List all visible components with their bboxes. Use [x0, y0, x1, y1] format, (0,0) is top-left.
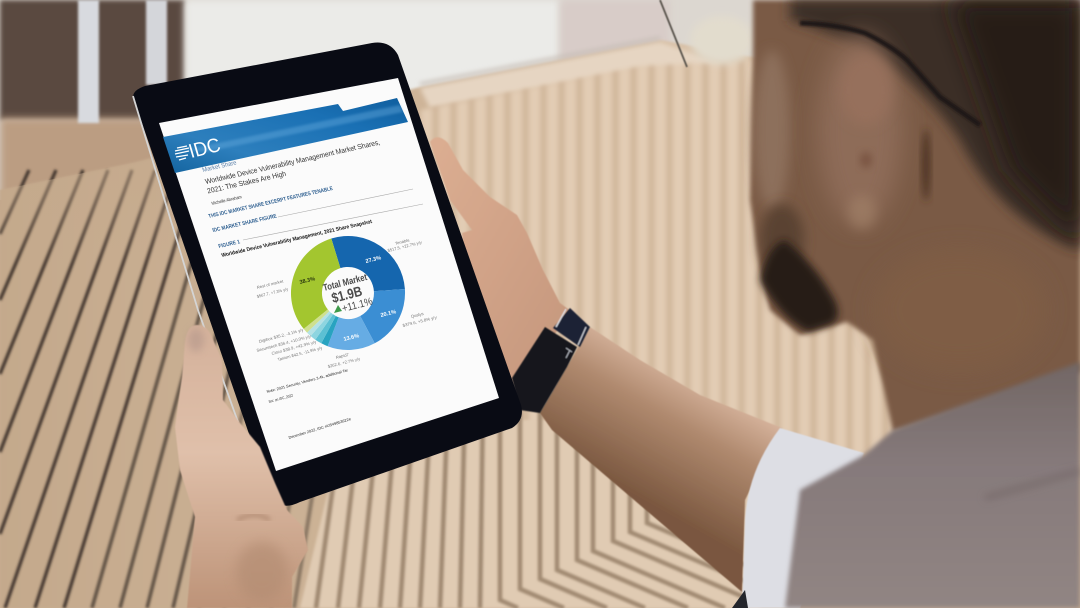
shirt cuff [742, 428, 864, 608]
ear [818, 35, 930, 229]
report headings [201, 138, 381, 259]
chart vendor labels [256, 237, 438, 369]
chart vendor labels: Rapid7 [335, 352, 350, 360]
dark strip below arm [732, 590, 748, 608]
shirt [785, 362, 1080, 608]
chart vendor labels: Securetech $36.4, +10.9% y/y [256, 333, 312, 353]
tablet body [133, 42, 522, 506]
chart vendor labels: $262.6, +2.7% y/y [327, 356, 361, 369]
chart vendor labels: Qualys [410, 311, 424, 319]
background wall [0, 0, 1080, 208]
floor chevron pattern [500, 400, 780, 608]
IDC logo: IDC [186, 134, 223, 163]
report divider rules [243, 189, 423, 240]
woven floor base and top band [0, 38, 900, 608]
tablet screen [159, 78, 499, 471]
wristwatch strap [512, 308, 590, 413]
eyeglasses arm [800, 23, 980, 125]
woven floor: dark stripes fanning on the left [0, 170, 365, 608]
hair [790, 0, 1080, 250]
chart vendor labels: Cisco $38.9, +42.9% y/y [271, 339, 318, 356]
chart vendor labels: Tenable [395, 237, 411, 246]
woven floor: lower vertical stripes [300, 400, 760, 608]
donut percentage labels: 20.1% [380, 309, 397, 319]
floor fade at top of stripes [0, 106, 400, 265]
donut centre total [322, 272, 374, 315]
report headings: THIS IDC MARKET SHARE EXCERPT FEATURES TENABLE [208, 186, 334, 220]
donut chart [291, 236, 405, 350]
report headings: FIGURE 1 [218, 239, 241, 250]
chart notes and footer [266, 368, 351, 440]
donut percentage labels: 13.6% [343, 333, 360, 343]
donut centre total: $1.9B [330, 283, 364, 306]
donut percentage labels [299, 255, 397, 343]
report headings: Market Share [201, 159, 238, 174]
donut centre total: Total Market [322, 272, 369, 294]
chart vendor labels: Rest of market [256, 278, 284, 290]
report headings: Worldwide Device Vulnerability Management, 2021 Share Snapshot [221, 219, 373, 259]
chart vendor labels: Tanium $42.5, -11.9% y/y [277, 345, 324, 362]
report headings: 2021: The Stakes Are High [206, 169, 287, 195]
chart vendor labels: Digibox $35.2, -4.1% y/y [258, 327, 305, 344]
donut percentage labels: 27.3% [365, 255, 382, 265]
report headings: IDC MARKET SHARE FIGURE [212, 214, 278, 234]
donut centre total: +11.1% [341, 296, 374, 315]
donut percentage labels: 38.3% [299, 276, 316, 286]
report header band [163, 98, 408, 173]
right hand holding tablet [430, 137, 572, 385]
chart vendor labels: $379.6, +5.8% y/y [402, 314, 438, 328]
left hand holding tablet [175, 325, 308, 608]
chart vendor labels: $517.5, +22.7% y/y [387, 239, 423, 253]
report headings: Michelle Abraham [211, 194, 243, 206]
chart vendor labels: $567.7, +7.3% y/y [256, 286, 289, 299]
beard [760, 204, 838, 332]
shirt crease [985, 471, 1080, 498]
chart notes and footer: Note: 2021 Security, Vendors 3.4k, additional Tar [266, 368, 349, 394]
woven floor: pale vertical stripes, upper right [420, 60, 900, 520]
chart notes and footer: December 2022, IDC #US49853622e [288, 417, 351, 440]
chart notes and footer: Src: on IDC, 2022 [268, 394, 293, 404]
lens blur and glasses temple [660, 0, 754, 67]
forearm [540, 327, 782, 592]
man's head: face and neck [750, 0, 1080, 432]
white pillars [78, 0, 167, 123]
report headings: Worldwide Device Vulnerability Management Market Shares, [204, 138, 381, 186]
